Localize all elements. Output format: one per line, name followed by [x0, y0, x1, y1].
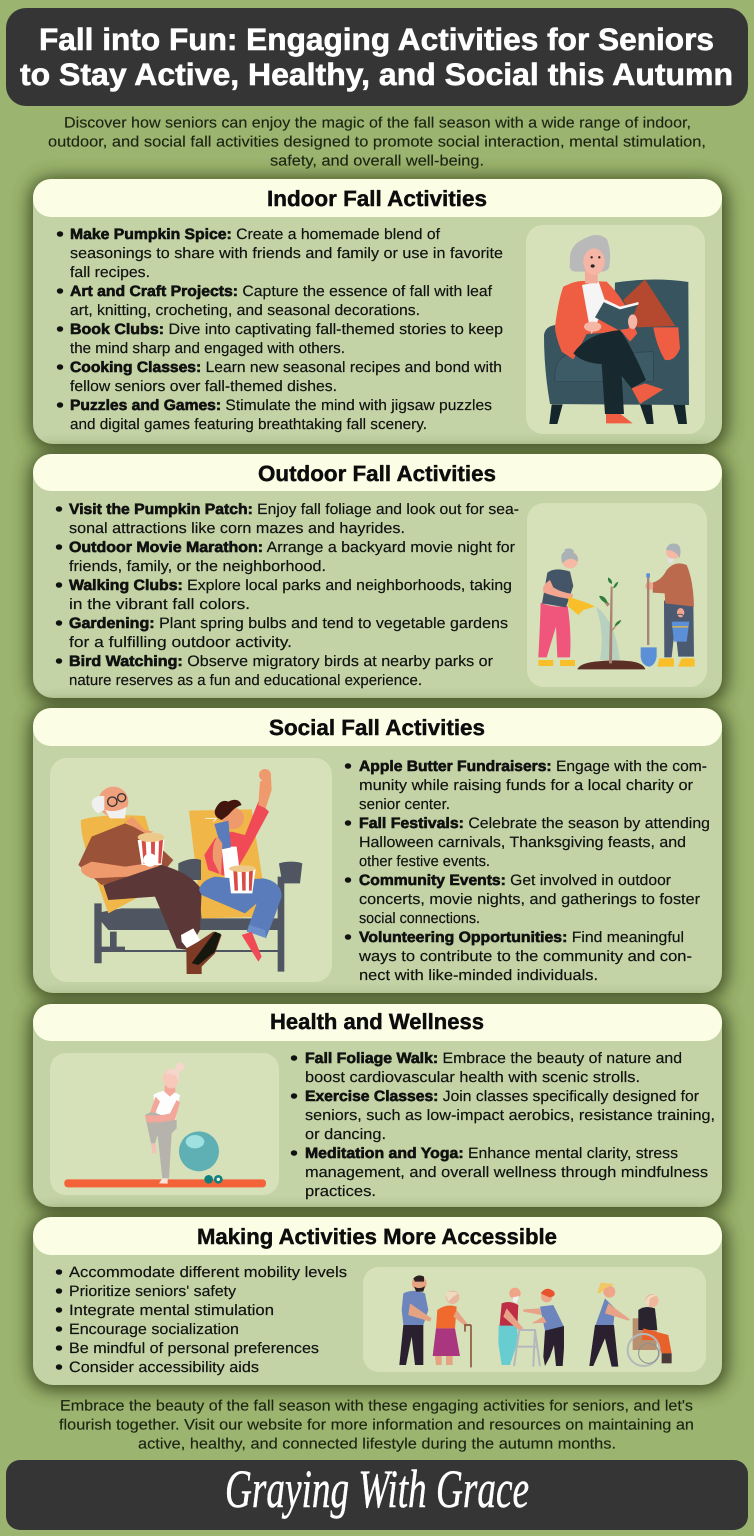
bullet: exercise classes: seniors, such as low-impact aerobics, resistance training,: [305, 1107, 715, 1124]
bullet: make pumpkin spice: [57, 226, 503, 281]
bullet: volunteering opportunities: Volunteering Opportunities: Find meaningful: [359, 929, 684, 946]
bullet: fall foliage walk: [291, 1050, 682, 1086]
bullet: fall festivals: [345, 815, 710, 870]
image panel: caregivers helping seniors: [363, 1267, 706, 1372]
bullet: bird watching: Bird Watching: Observe migratory birds at nearby parks or: [69, 653, 493, 670]
bullet: gardening: for a fulfilling outdoor activity.: [69, 634, 292, 651]
bullet: apple butter fundraisers: [345, 758, 707, 813]
bullet: make pumpkin spice: seasonings to share with friends and family or use in favorite: [70, 245, 503, 262]
bullet list: accessibility tips: Prioritize seniors' safety: [69, 1283, 237, 1300]
panel: social fall activities: [30, 707, 727, 998]
bullet: volunteering opportunities: nect with like-minded individuals.: [359, 967, 598, 984]
closing paragraph: Embrace the beauty of the fall season with these engaging activities for seniors, and let's: [60, 1398, 693, 1414]
bullet: fall foliage walk: Fall Foliage Walk: Embrace the beauty of nature and: [305, 1050, 682, 1067]
footer brand banner: [6, 1459, 748, 1530]
closing paragraph: [59, 1398, 694, 1452]
bullet: make pumpkin spice: Make Pumpkin Spice: Create a homemade blend of: [70, 226, 441, 243]
footer brand banner: Graying With Grace: [225, 1459, 529, 1519]
title banner: Fall into Fun: Engaging Activities for Seniors: [39, 22, 714, 57]
bullet: gardening: Gardening: Plant spring bulbs and tend to vegetable gardens: [69, 615, 508, 632]
bullet: apple butter fundraisers: Apple Butter Fundraisers: Engage with the com-: [359, 758, 707, 775]
title banner: to Stay Active, Healthy, and Social this Autumn: [20, 57, 733, 92]
bullet: community events: concerts, movie nights, and gatherings to foster: [359, 891, 700, 908]
bullet: outdoor movie marathon: friends, family, or the neighborhood.: [69, 558, 326, 575]
bullet: book clubs: the mind sharp and engaged with others.: [70, 340, 345, 357]
bullet: puzzles and games: Puzzles and Games: Stimulate the mind with jigsaw puzzles: [70, 397, 492, 414]
bullet: art and craft projects: [57, 283, 493, 319]
closing paragraph: active, healthy, and connected lifestyle during the autumn months.: [138, 1436, 616, 1452]
intro paragraph: [48, 114, 706, 170]
bullet: bird watching: nature reserves as a fun and educational experience.: [69, 672, 422, 689]
bullet: book clubs: [57, 321, 503, 357]
heading: indoor: [33, 179, 722, 217]
intro paragraph: outdoor, and social fall activities designed to promote social interaction, mental stimulation,: [48, 134, 706, 150]
bullet: volunteering opportunities: ways to contribute to the community and con-: [358, 948, 692, 965]
panel: outdoor fall activities: [30, 453, 727, 703]
bullet: volunteering opportunities: [345, 929, 692, 984]
bullet: fall festivals: Fall Festivals: Celebrate the season by attending: [359, 815, 710, 832]
bullet: outdoor movie marathon: [56, 539, 515, 575]
bullet: visit the pumpkin patch: Visit the Pumpkin Patch: Enjoy fall foliage and look out for sea-: [69, 501, 519, 518]
heading: indoor: Indoor Fall Activities: [267, 186, 487, 211]
bullet: fall festivals: Halloween carnivals, Thanksgiving feasts, and: [359, 834, 686, 851]
heading: outdoor: [33, 454, 722, 491]
image panel: seniors at the movies: [50, 758, 332, 982]
panel: health and wellness: [30, 1003, 727, 1212]
bullet: art and craft projects: Art and Craft Projects: Capture the essence of fall with leaf: [70, 283, 493, 300]
bullet: cooking classes: fellow seniors over fall-themed dishes.: [70, 378, 337, 395]
bullet: cooking classes: Cooking Classes: Learn new seasonal recipes and bond with: [70, 359, 502, 376]
bullet: make pumpkin spice: fall recipes.: [70, 264, 150, 281]
heading: health: [33, 1004, 722, 1041]
bullet list: accessibility tips: [56, 1264, 347, 1376]
panel: indoor fall activities: [30, 178, 727, 449]
bullet: visit the pumpkin patch: [56, 501, 519, 537]
closing paragraph: flourish together. Visit our website for more information and resources on maintaining an: [59, 1416, 694, 1434]
bullet: meditation and yoga: [291, 1145, 708, 1200]
bullet: walking clubs: Walking Clubs: Explore local parks and neighborhoods, taking: [69, 577, 512, 594]
bullet list: accessibility tips: Accommodate different mobility levels: [69, 1264, 347, 1281]
image panel: woman stretching on a mat: [50, 1053, 279, 1195]
bullet list: accessibility tips: Be mindful of personal preferences: [69, 1340, 319, 1357]
bullet: cooking classes: [57, 359, 502, 395]
title banner: [6, 8, 748, 106]
bullet: exercise classes: [291, 1088, 715, 1143]
bullet: exercise classes: Exercise Classes: Join classes specifically designed for: [305, 1088, 699, 1105]
bullet: meditation and yoga: Meditation and Yoga: Enhance mental clarity, stress: [305, 1145, 678, 1162]
bullet: exercise classes: or dancing.: [305, 1126, 386, 1143]
bullet: fall foliage walk: boost cardiovascular health with scenic strolls.: [305, 1069, 640, 1086]
bullet: puzzles and games: [57, 397, 492, 433]
bullet: walking clubs: in the vibrant fall colors.: [69, 596, 250, 613]
image panel: couple planting a tree: [527, 503, 707, 687]
bullet: bird watching: [56, 653, 493, 689]
heading: social: Social Fall Activities: [269, 715, 485, 740]
bullet: fall festivals: other festive events.: [359, 853, 490, 870]
intro paragraph: safety, and overall well-being.: [270, 152, 484, 170]
bullet: outdoor movie marathon: Outdoor Movie Marathon: Arrange a backyard movie night for: [69, 539, 515, 556]
bullet: community events: Community Events: Get involved in outdoor: [359, 872, 671, 889]
panel: making activities more accessible: [30, 1216, 727, 1390]
bullet list: accessibility tips: Integrate mental stimulation: [69, 1302, 274, 1319]
bullet: community events: [345, 872, 700, 927]
image panel: senior reading in armchair: [526, 225, 705, 434]
bullet: apple butter fundraisers: senior center.: [359, 796, 450, 813]
bullet: art and craft projects: art, knitting, crocheting, and seasonal decorations.: [70, 302, 420, 319]
bullet: meditation and yoga: management, and overall wellness through mindfulness: [305, 1164, 708, 1181]
heading: social: [33, 708, 722, 746]
bullet: visit the pumpkin patch: sonal attractions like corn mazes and hayrides.: [69, 520, 405, 537]
intro paragraph: Discover how seniors can enjoy the magic of the fall season with a wide range of indoor,: [64, 114, 691, 132]
bullet: community events: social connections.: [359, 910, 480, 927]
heading: accessible: [33, 1217, 722, 1255]
bullet: gardening: [56, 615, 508, 651]
bullet list: accessibility tips: Encourage socialization: [69, 1321, 239, 1338]
heading: accessible: Making Activities More Accessible: [197, 1224, 557, 1249]
bullet: apple butter fundraisers: munity while raising funds for a local charity or: [359, 777, 693, 794]
heading: outdoor: Outdoor Fall Activities: [258, 461, 496, 486]
heading: health: Health and Wellness: [270, 1009, 484, 1034]
bullet: book clubs: Book Clubs: Dive into captivating fall-themed stories to keep: [70, 321, 503, 338]
bullet: walking clubs: [56, 577, 512, 613]
bullet list: accessibility tips: Consider accessibility aids: [69, 1359, 259, 1376]
bullet: puzzles and games: and digital games featuring breathtaking fall scenery.: [70, 416, 427, 433]
bullet: meditation and yoga: practices.: [305, 1183, 376, 1200]
